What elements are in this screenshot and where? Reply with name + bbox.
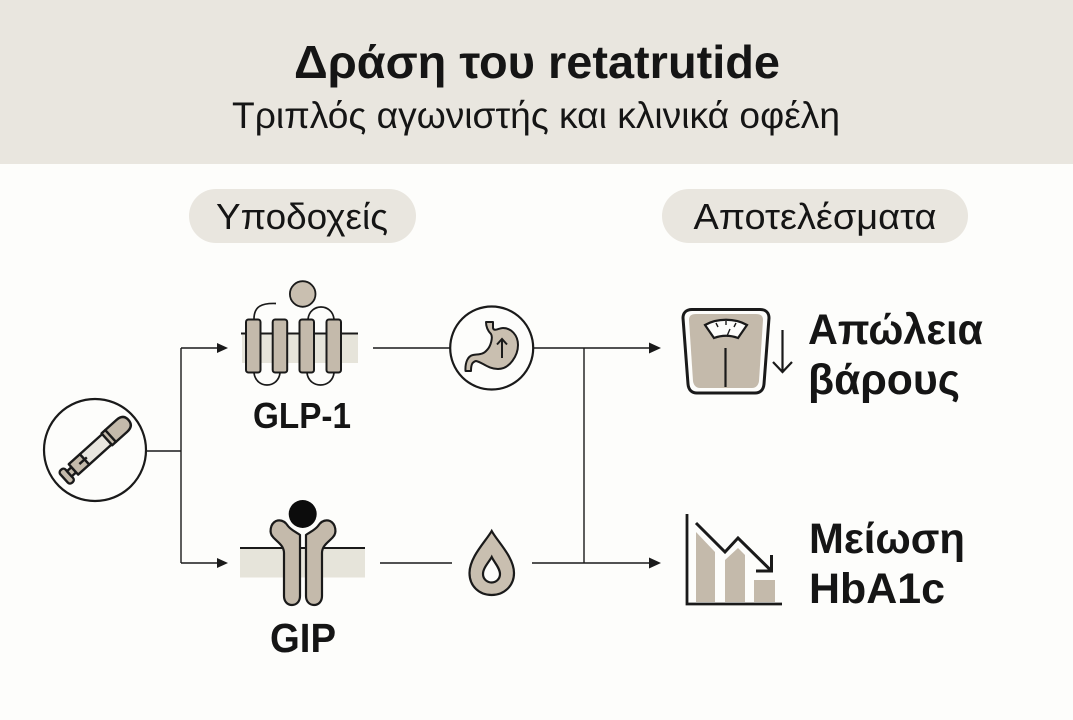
icon: GLP-1 receptor (241, 281, 358, 436)
label: HbA1c reduction (809, 515, 965, 613)
header band (0, 0, 1073, 164)
pill: receptors (189, 189, 416, 243)
label: weight loss: βάρους (808, 356, 960, 404)
subtitle: Τριπλός αγωνιστής και κλινικά οφέλη (232, 95, 840, 136)
label: weight loss (808, 306, 983, 404)
label: HbA1c reduction: Μείωση (809, 515, 965, 563)
connector arrows (147, 342, 661, 568)
label: GLP-1: GLP-1 (253, 395, 351, 436)
label: GIP: GIP (270, 615, 336, 661)
icon: down arrow (773, 330, 792, 372)
title: Δράση του retatrutide (294, 36, 780, 88)
icon: stomach (450, 306, 533, 390)
icon: weighing scale (683, 310, 792, 393)
icon: falling bar chart (687, 514, 782, 604)
pill: results: Αποτελέσματα (694, 196, 936, 237)
icon: GIP receptor (240, 500, 365, 661)
icon: injection pen (44, 399, 146, 501)
label: HbA1c reduction: HbA1c (809, 565, 945, 613)
label: weight loss: Απώλεια (808, 306, 983, 354)
pill: receptors: Υποδοχείς (216, 196, 388, 237)
icon: blood drop (470, 531, 514, 595)
pill: results (662, 189, 968, 243)
